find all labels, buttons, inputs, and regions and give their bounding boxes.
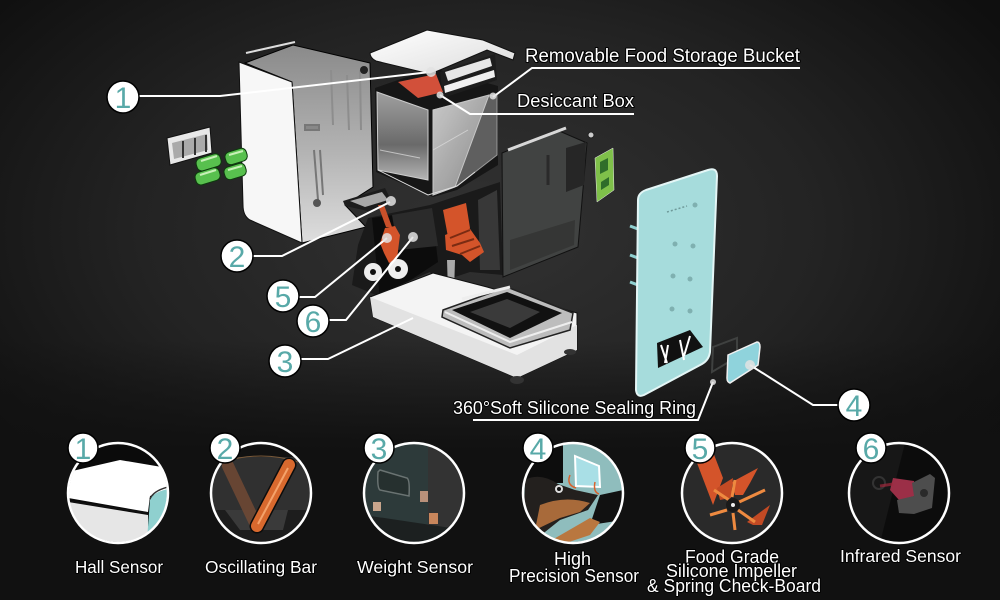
label: 360°Soft Silicone Sealing Ring xyxy=(453,379,716,420)
detail 6: Infrared Sensor: 6 xyxy=(863,433,879,466)
callout 5: 5 xyxy=(275,281,291,314)
callout 3: 3 xyxy=(277,346,293,379)
weighing base xyxy=(370,273,577,384)
central mechanism xyxy=(352,182,503,305)
rear circuit panel xyxy=(502,128,594,277)
caption: Hall Sensor: Hall Sensor xyxy=(75,557,163,577)
caption: High Precision Sensor xyxy=(509,549,639,586)
detail 5: Food Grade Silicone Impeller: 5 xyxy=(692,433,708,466)
detail 5: Food Grade Silicone Impeller xyxy=(682,433,782,543)
callout 4: 4 xyxy=(846,390,862,423)
silicone sealing ring xyxy=(712,338,737,372)
callout 1 xyxy=(107,67,436,115)
detail 4: High Precision Sensor xyxy=(523,433,623,545)
label: Removable Food Storage Bucket xyxy=(490,46,801,100)
detail 1: Hall Sensor xyxy=(68,433,168,545)
detail 6: Infrared Sensor xyxy=(849,433,949,543)
caption: High Precision Sensor: High xyxy=(554,549,591,569)
detail 2: Oscillating Bar xyxy=(210,433,311,545)
detail 3: Weight Sensor: 3 xyxy=(371,433,387,466)
caption: Food Grade Silicone Impeller and Spring Check-Board: & Spring Check-Board xyxy=(647,576,821,596)
callout 6 xyxy=(297,232,418,339)
label: 360°Soft Silicone Sealing Ring: 360°Soft Silicone Sealing Ring xyxy=(453,398,696,418)
orange impellers xyxy=(380,203,484,263)
caption: Weight Sensor: Weight Sensor xyxy=(357,557,473,577)
battery compartment and cells xyxy=(167,127,249,186)
label: Desiccant Box xyxy=(436,91,634,114)
caption: Oscillating Bar: Oscillating Bar xyxy=(205,557,317,577)
precision sensor plate xyxy=(727,342,760,383)
caption: Food Grade Silicone Impeller and Spring Check-Board: Food Grade xyxy=(685,547,779,567)
caption: Infrared Sensor: Infrared Sensor xyxy=(840,546,961,566)
label: Removable Food Storage Bucket: Removable Food Storage Bucket xyxy=(525,46,801,67)
callout 4 xyxy=(745,360,870,423)
callout 3 xyxy=(269,318,413,379)
teal back cover xyxy=(630,169,717,396)
detail 3: Weight Sensor xyxy=(364,433,464,545)
detail 2: Oscillating Bar: 2 xyxy=(217,433,233,466)
callout 6: 6 xyxy=(305,306,321,339)
callout 1: 1 xyxy=(115,82,131,115)
callout 5 xyxy=(267,233,392,314)
caption: Food Grade Silicone Impeller and Spring Check-Board: Silicone Impeller xyxy=(666,561,797,581)
caption: High Precision Sensor: Precision Sensor xyxy=(509,566,639,586)
outer shell housing xyxy=(239,42,392,243)
lid with desiccant box xyxy=(370,30,515,98)
caption: Food Grade Silicone Impeller and Spring Check-Board xyxy=(647,547,821,596)
food storage bucket xyxy=(375,68,498,197)
callout 2: 2 xyxy=(229,241,245,274)
detail 1: Hall Sensor: 1 xyxy=(75,433,91,466)
detail 4: High Precision Sensor: 4 xyxy=(530,433,546,466)
callout 2 xyxy=(221,196,396,274)
label: Desiccant Box: Desiccant Box xyxy=(517,91,634,111)
circuit board xyxy=(595,148,614,202)
